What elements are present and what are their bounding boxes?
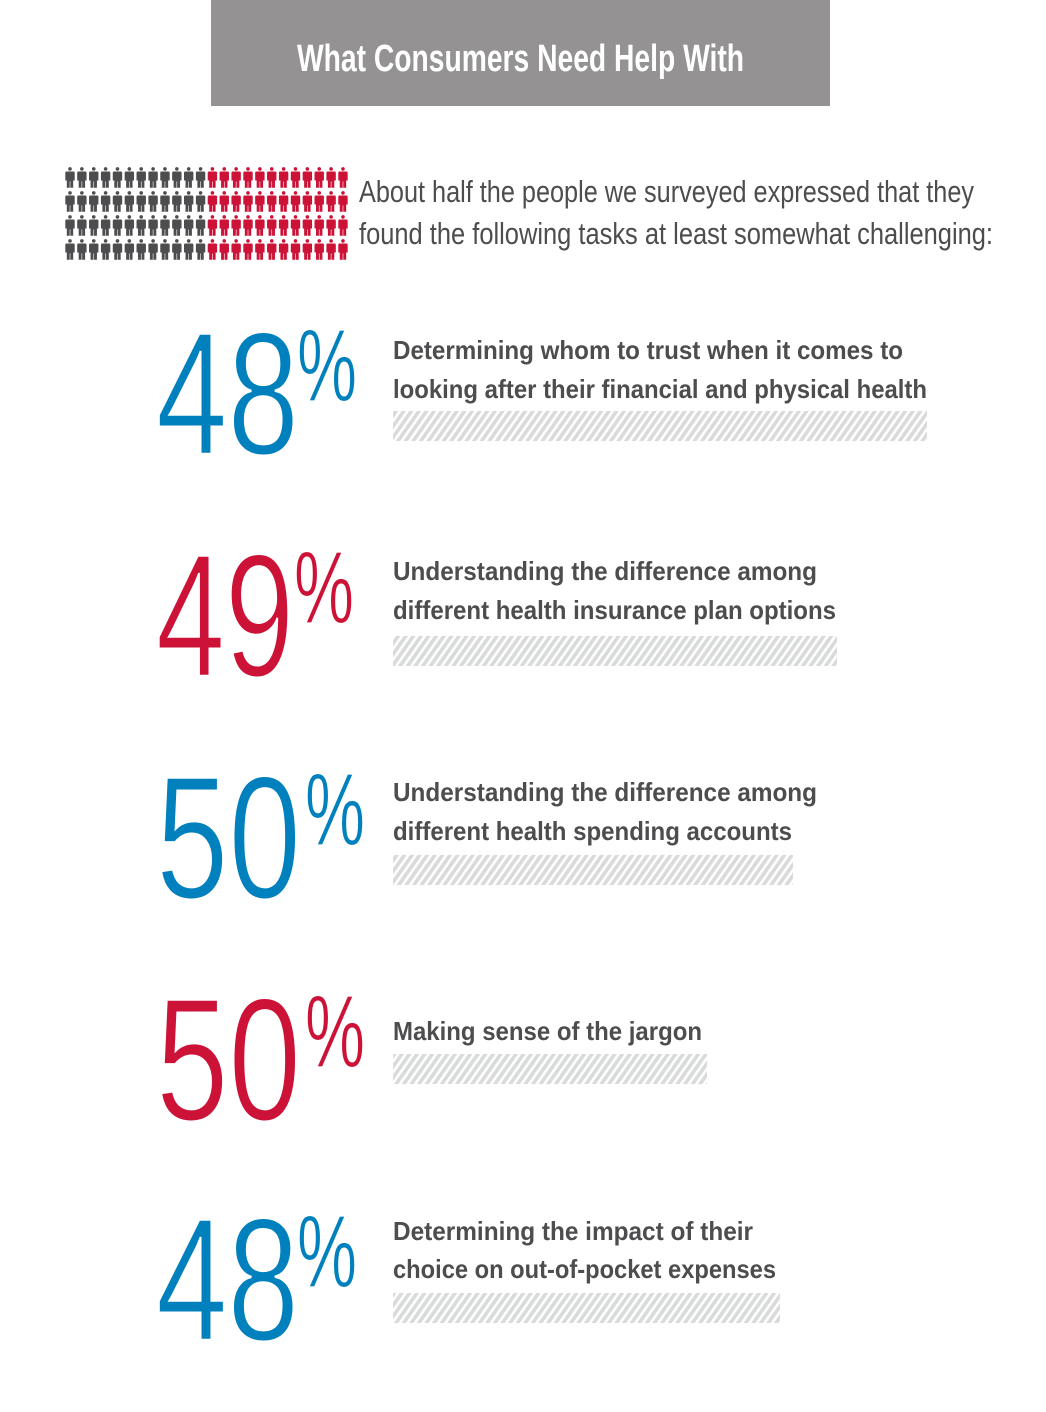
stat row 2: 49%	[156, 519, 837, 714]
stat row 3: 50%	[156, 741, 817, 936]
title banner	[211, 0, 830, 106]
label: looking after their financial and physical health	[393, 374, 927, 404]
stat: 50%: %	[305, 752, 365, 867]
hatched bar	[393, 1293, 780, 1323]
stat: 50%: 50	[156, 963, 301, 1158]
label: Determining the impact of their	[393, 1216, 753, 1246]
stat: 48%: 48	[156, 297, 299, 492]
icon: grid of people half grey half red	[65, 167, 348, 260]
stat: 50%: %	[305, 974, 365, 1089]
label: Determining whom to trust when it comes to	[393, 335, 903, 365]
hatched bar	[393, 636, 837, 666]
stat row 4: 50%	[156, 963, 707, 1158]
hatched bar	[393, 411, 927, 441]
label	[393, 335, 927, 404]
label: Understanding the difference among	[393, 556, 817, 586]
label	[393, 777, 817, 846]
stat row 5: 48%	[156, 1183, 780, 1378]
label: different health spending accounts	[393, 816, 792, 846]
intro text	[359, 174, 993, 251]
stat: 48%: %	[297, 1194, 357, 1309]
label	[393, 1216, 776, 1284]
stat: 49%: %	[294, 530, 354, 645]
stat: 48%: 48	[156, 1183, 299, 1378]
stat: 48%: %	[297, 308, 357, 423]
stat: 50%: 50	[156, 741, 301, 936]
hatched bar	[393, 855, 793, 885]
label: Making sense of the jargon	[393, 1016, 702, 1046]
label: different health insurance plan options	[393, 595, 836, 625]
label: Understanding the difference among	[393, 777, 817, 807]
label	[393, 556, 836, 625]
label: choice on out-of-pocket expenses	[393, 1254, 776, 1284]
title banner: What Consumers Need Help With	[297, 38, 744, 80]
stat row 1: 48%	[156, 297, 927, 492]
stat: 49%: 49	[156, 519, 294, 714]
hatched bar	[393, 1054, 707, 1084]
